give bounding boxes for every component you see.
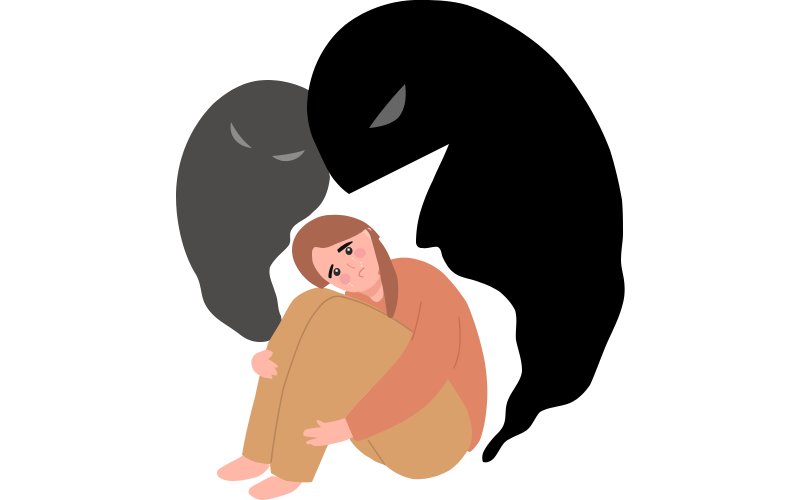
tears xyxy=(349,258,362,287)
sleeve fold lines xyxy=(412,302,460,368)
trouser crease line xyxy=(271,296,413,462)
black shadow figure xyxy=(307,0,625,462)
hair xyxy=(292,215,380,289)
eye highlights xyxy=(336,248,350,272)
nose xyxy=(347,264,355,268)
ear xyxy=(362,228,372,240)
eye lower xyxy=(334,268,340,276)
sweater sleeve xyxy=(345,300,460,441)
eye upper xyxy=(346,247,352,255)
hand on left leg xyxy=(251,350,278,379)
face xyxy=(312,226,398,318)
seated girl xyxy=(217,215,487,500)
gray figure left eye xyxy=(231,122,252,148)
back crease line xyxy=(368,440,385,465)
hand on knee xyxy=(303,418,353,446)
eyebrow lower xyxy=(329,265,333,278)
neck shadow xyxy=(358,272,382,297)
right hair strand xyxy=(362,226,398,318)
cheek upper xyxy=(354,248,366,258)
back trouser leg and hip xyxy=(345,379,472,479)
gray shadow figure xyxy=(176,80,330,342)
sweater torso xyxy=(345,258,487,452)
neck xyxy=(358,270,383,302)
foot front xyxy=(248,476,302,500)
front trouser leg xyxy=(242,287,413,482)
foot back xyxy=(217,456,270,481)
black figure eye xyxy=(369,84,406,128)
mouth xyxy=(359,268,364,277)
cheek lower xyxy=(340,274,350,284)
eyebrow upper xyxy=(338,242,352,252)
gray figure right eye xyxy=(272,150,305,161)
